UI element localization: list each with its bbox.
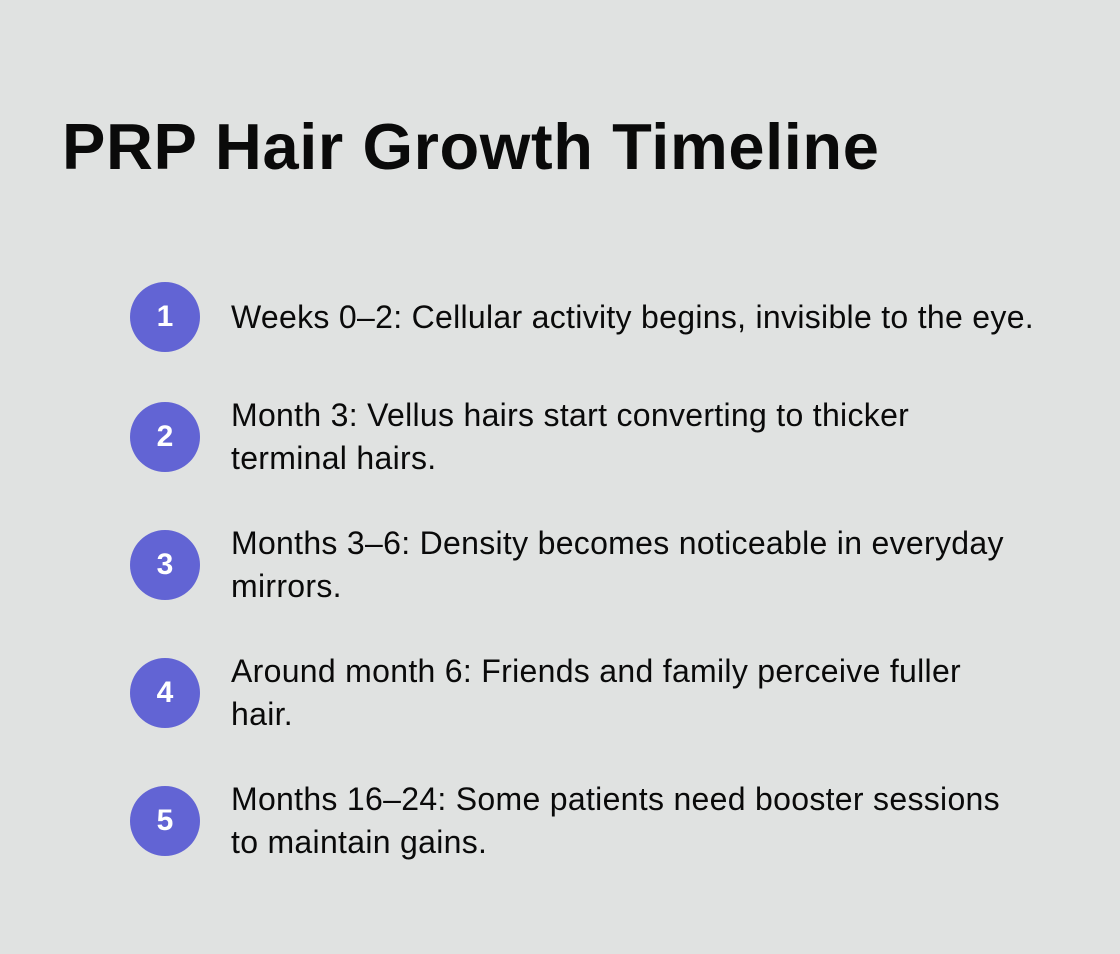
text 4: Around month 6: Friends and family perceive fuller — [231, 653, 961, 689]
text 3: Months 3–6: Density becomes noticeable in everyday — [231, 525, 1004, 561]
step 4 — [130, 653, 961, 732]
text 2: terminal hairs. — [231, 440, 436, 476]
text 5: Months 16–24: Some patients need booster sessions — [231, 781, 1000, 817]
title: PRP Hair Growth Timeline — [62, 110, 879, 183]
text 3: mirrors. — [231, 568, 342, 604]
step 1 — [130, 282, 1034, 352]
step 2 — [130, 397, 909, 476]
text 4 — [231, 653, 961, 732]
badge 4: 4 — [157, 676, 173, 709]
badge 3: 3 — [157, 548, 173, 581]
text 4: hair. — [231, 696, 293, 732]
text 5 — [231, 781, 1000, 860]
text 1: Weeks 0–2: Cellular activity begins, invisible to the eye. — [231, 298, 1034, 334]
text 2: Month 3: Vellus hairs start converting to thicker — [231, 397, 909, 433]
badge 5 — [130, 786, 200, 856]
step 5 — [130, 781, 1000, 860]
badge 2: 2 — [157, 420, 173, 453]
text 3 — [231, 525, 1004, 604]
step 3 — [130, 525, 1004, 604]
text 2 — [231, 397, 909, 476]
badge 3 — [130, 530, 200, 600]
text 5: to maintain gains. — [231, 824, 487, 860]
badge 4 — [130, 658, 200, 728]
badge 2 — [130, 402, 200, 472]
badge 1 — [130, 282, 200, 352]
badge 1: 1 — [157, 300, 173, 333]
badge 5: 5 — [157, 804, 173, 837]
